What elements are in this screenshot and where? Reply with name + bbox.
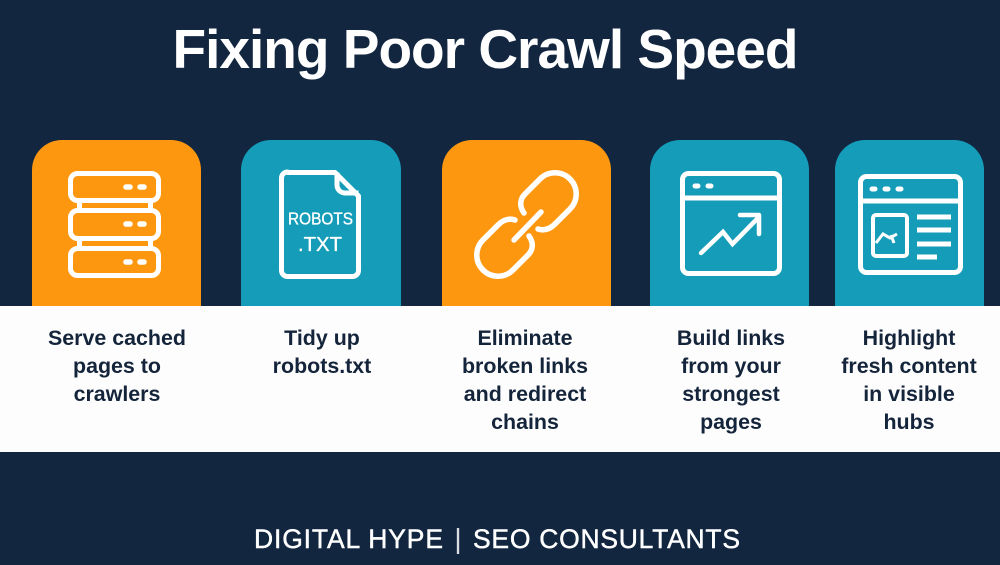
text: step 4 [677, 326, 785, 434]
icon: content hub page [860, 176, 961, 272]
footer brand: DIGITAL HYPE [254, 524, 443, 554]
icon: browser growth chart [682, 174, 780, 274]
icon: robots file: ROBOTS [288, 208, 353, 228]
panel: server card [32, 140, 201, 320]
text: step 4: pages [700, 410, 762, 434]
text: step 1: Serve cached [48, 326, 186, 350]
panel: link card [442, 140, 611, 320]
footer brand [254, 523, 740, 554]
text: step 3: and redirect [464, 382, 586, 406]
text: step 1 [48, 326, 186, 406]
icon: chain link [477, 173, 576, 276]
text: step 5 [841, 326, 977, 434]
text: step 5: in visible [863, 382, 955, 406]
title: Fixing Poor Crawl Speed [173, 18, 797, 80]
text: step 1: pages to [73, 354, 161, 378]
text: step 4: from your [681, 354, 781, 378]
panel: white label band [0, 306, 1000, 452]
text: step 4: strongest [682, 382, 780, 406]
panel: robots card [241, 140, 401, 320]
text: step 5: Highlight [863, 326, 955, 350]
text: step 3: Eliminate [477, 326, 573, 350]
icon: robots file: .TXT [298, 233, 342, 256]
text: step 2: robots.txt [273, 354, 371, 378]
panel: growth card [650, 140, 809, 320]
text: step 5: hubs [883, 410, 935, 434]
text: step 3: broken links [462, 354, 588, 378]
text: step 2: Tidy up [284, 326, 360, 350]
text: step 3: chains [491, 410, 559, 434]
icon: server stack [70, 174, 158, 276]
footer brand: | [454, 523, 462, 554]
panel: hub card [835, 140, 984, 320]
text: step 4: Build links [677, 326, 785, 350]
text: step 3 [462, 326, 588, 434]
icon: robots file [282, 172, 358, 276]
text: step 2 [273, 326, 371, 378]
text: step 1: crawlers [74, 382, 160, 406]
text: step 5: fresh content [841, 354, 977, 378]
footer brand: SEO CONSULTANTS [473, 524, 740, 554]
